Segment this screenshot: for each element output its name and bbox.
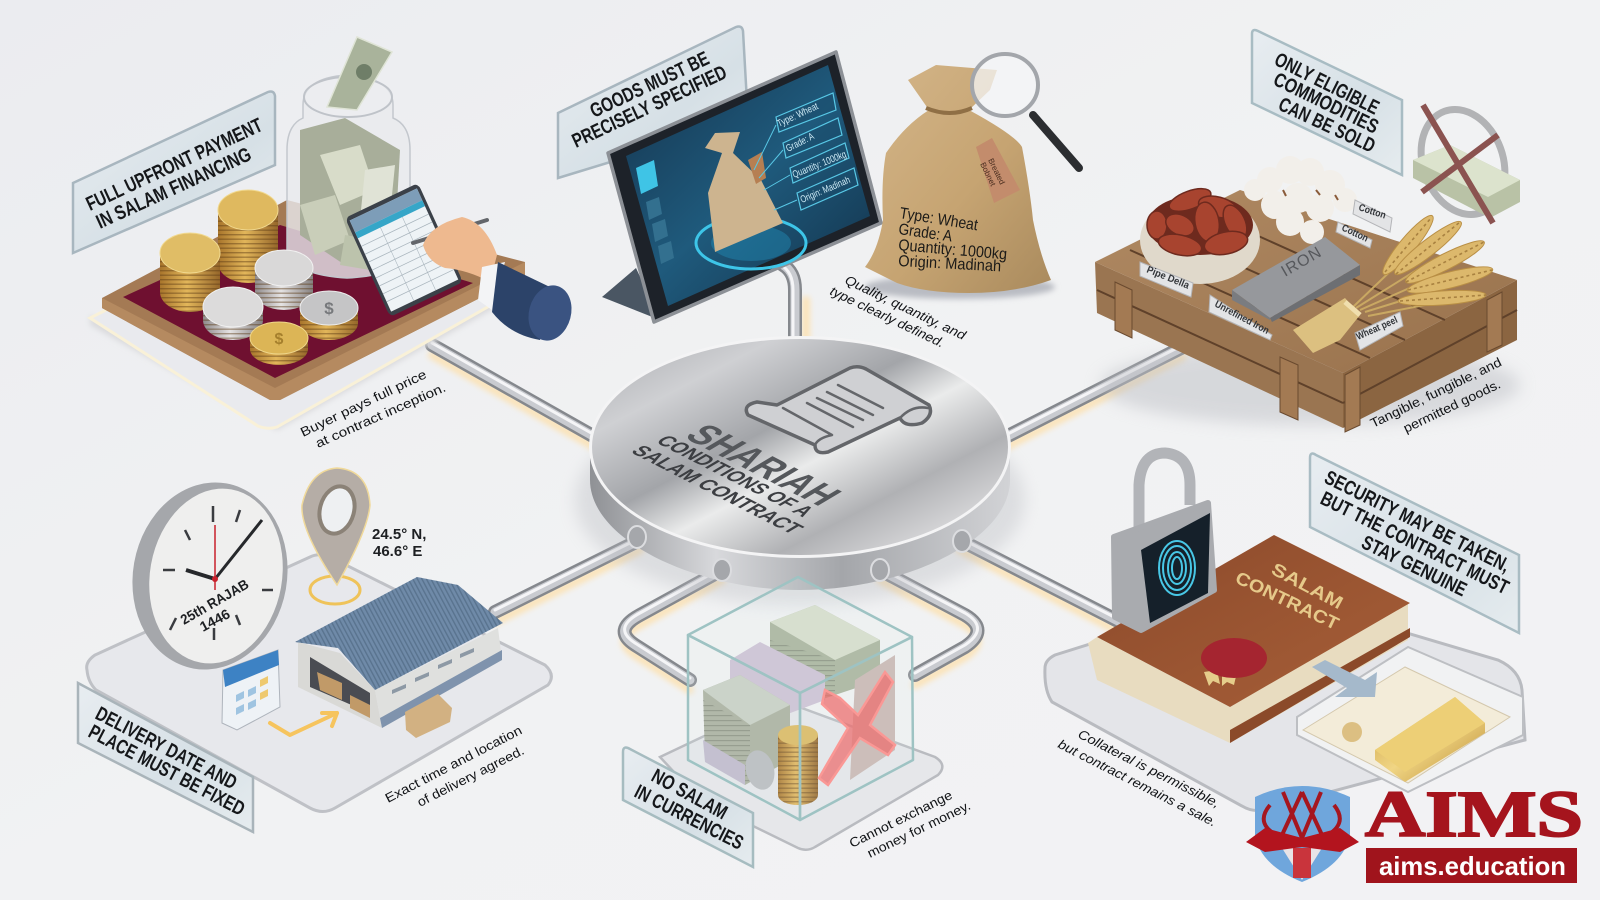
icon: hand with pen [413, 217, 578, 345]
caption: type clearly defined. [828, 283, 947, 351]
icon: coin stacks: $ [275, 331, 284, 348]
icon: contract book: CONTRACT [1232, 568, 1342, 634]
central hub [575, 336, 1025, 605]
caption [847, 787, 973, 861]
icon: iron ingot: IRON [1278, 244, 1325, 280]
icon: burlap sack: Breated [986, 157, 1007, 186]
glowing arrow [270, 713, 337, 735]
connector pipes [432, 265, 1183, 690]
icon: wall clock: 1446 [197, 605, 233, 635]
icon: coin stacks [160, 190, 358, 365]
icon: location pin [302, 468, 370, 604]
crate tags [1140, 200, 1403, 350]
caption: Tangible, fungible, and [1368, 354, 1504, 431]
label: PLACE MUST BE FIXED [85, 721, 248, 821]
icon: red cross [819, 672, 895, 785]
icon: collateral box [1297, 647, 1523, 792]
label: BUT THE CONTRACT MUST [1317, 488, 1512, 599]
panel: goods precisely specified [558, 26, 1079, 351]
icon: iron ingot [1232, 237, 1360, 322]
icon: specification tablet [602, 52, 881, 322]
hub title [625, 418, 852, 537]
platform [1045, 590, 1525, 810]
hub title: SHARIAH [676, 418, 852, 511]
icon: calendar [222, 650, 280, 730]
wooden tray [102, 200, 525, 400]
platform [87, 555, 551, 812]
label [78, 683, 253, 832]
panel: delivery date and place [78, 468, 551, 832]
icon: wall clock [118, 470, 302, 682]
icon: fingerprint padlock [1114, 453, 1214, 630]
coordinates: 24.5° N, [372, 526, 426, 543]
caption: Quality, quantity, and [843, 272, 969, 343]
coordinates: 46.6° E [373, 543, 422, 560]
panel: security and collateral [1045, 453, 1525, 830]
label: IN CURRENCIES [631, 781, 747, 854]
label: DELIVERY DATE AND [92, 703, 240, 794]
icon: cash stacks [703, 605, 895, 805]
caption: permitted goods. [1401, 376, 1503, 436]
panel: eligible commodities [1095, 30, 1520, 436]
label: CAN BE SOLD [1275, 94, 1378, 157]
icon: prohibited cash [1407, 98, 1520, 226]
caption: at contract inception. [313, 380, 448, 451]
logo: AIMS [1246, 778, 1583, 883]
icon: specification tablet: Origin: Madinah [799, 175, 852, 206]
label: PRECISELY SPECIFIED [569, 62, 730, 153]
caption [298, 367, 448, 451]
caption: of delivery agreed. [415, 743, 527, 810]
label [1310, 454, 1519, 633]
icon: wall clock: 25th RAJAB [178, 576, 251, 628]
icon: specification tablet: Quantity: 1000kg [791, 149, 848, 181]
icon: wheat bundle [1293, 211, 1495, 353]
platform [90, 295, 500, 430]
icon: bowl of dates [1140, 184, 1260, 284]
pipe collars [628, 526, 971, 581]
platform [660, 700, 942, 850]
caption: money for money. [865, 798, 973, 861]
label: STAY GENUINE [1358, 532, 1470, 601]
icon: contract book: SALAM [1268, 559, 1346, 613]
crate tags: Unrefined Iron [1213, 299, 1271, 337]
icon: coin stacks: $ [324, 299, 334, 318]
arrow [1312, 660, 1377, 697]
crate tags: Cotton [1357, 202, 1387, 222]
icon: jar of money [287, 37, 410, 278]
logo: AIMS: AIMS [1365, 778, 1583, 851]
icon: pallet box [405, 694, 452, 738]
label [558, 26, 748, 178]
icon: warehouse [295, 577, 503, 728]
icon: burlap sack: Bobnet [978, 161, 998, 188]
label: COMMODITIES [1270, 69, 1382, 138]
icon: contract book [1088, 535, 1410, 743]
icon: burlap sack: Origin: Madinah [898, 253, 1002, 275]
shield [1255, 786, 1350, 882]
crate tags: Cotton [1340, 223, 1370, 245]
icon: burlap sack: Type: Wheat [898, 205, 980, 234]
icon: specification tablet: Grade: A [784, 131, 816, 155]
crate tags: Wheat peel [1355, 315, 1400, 343]
label: NO SALAM [648, 765, 731, 824]
icon: contract scroll [746, 367, 930, 453]
label: ONLY ELIGIBLE [1271, 49, 1383, 120]
caption: Collateral is permissible, [1076, 726, 1222, 811]
caption: Buyer pays full price [298, 367, 429, 440]
label: IN SALAM FINANCING [93, 144, 255, 234]
icon: specification tablet: Type: Wheat [776, 101, 820, 130]
label [1252, 30, 1402, 175]
panel: full upfront payment [73, 37, 578, 451]
panel: no salam in currencies [623, 577, 973, 867]
icon: ledger tablet [345, 183, 463, 317]
caption [828, 272, 969, 351]
wax seal [1204, 670, 1237, 686]
caption: Exact time and location [382, 722, 524, 806]
icon: cotton [1244, 156, 1357, 244]
label: SECURITY MAY BE TAKEN, [1321, 467, 1513, 577]
coordinates [372, 526, 426, 560]
label [623, 748, 753, 867]
icon: burlap sack [865, 65, 1055, 299]
icon: magnifying glass [972, 54, 1079, 168]
label: FULL UPFRONT PAYMENT [83, 114, 266, 216]
label: GOODS MUST BE [587, 48, 713, 123]
caption: Cannot exchange [847, 787, 955, 851]
icon: burlap sack: Quantity: 1000kg [898, 237, 1008, 263]
crate tags: Pipe Della [1145, 265, 1191, 292]
label [73, 92, 275, 253]
hub title: CONDITIONS OF A [650, 433, 819, 520]
logo: AIMS: aims.education [1379, 851, 1566, 881]
hub title: SALAM CONTRACT [625, 443, 808, 537]
wooden crate [1095, 190, 1520, 432]
icon: glass cube [688, 577, 913, 820]
caption: but contract remains a sale. [1056, 736, 1219, 830]
icon: burlap sack: Grade: A [897, 221, 954, 246]
